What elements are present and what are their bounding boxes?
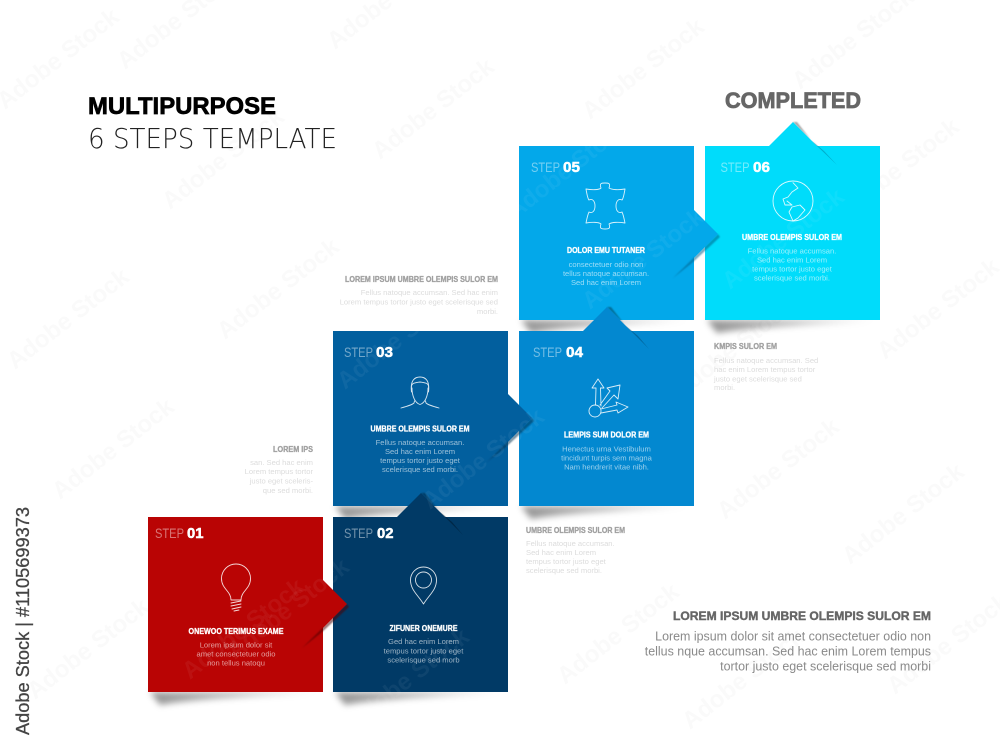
stock id caption: Adobe Stock | #1105699373 xyxy=(13,507,33,735)
note: below step 06: hac enim Lorem tempus tortor xyxy=(714,365,816,374)
note: top of step 03: Fellus natoque accumsan. Sed hac enim xyxy=(361,288,498,297)
text: Adobe Stock xyxy=(22,593,155,705)
card xyxy=(705,122,880,320)
text: step 03 xyxy=(370,424,470,474)
panel: step 01 xyxy=(148,517,349,705)
text: step 04 xyxy=(561,430,653,472)
note: below step 04: scelerisque sed morbi. xyxy=(526,566,602,575)
panel: step 05 xyxy=(519,146,720,333)
text: Adobe Stock xyxy=(177,573,310,685)
note: top of step 03: LOREM IPSUM UMBRE OLEMPIS SULOR EM xyxy=(345,275,498,284)
text: step 06 xyxy=(742,233,842,282)
step label: 01 xyxy=(187,526,204,542)
card xyxy=(333,493,508,692)
text: step 01: amet consectetuer odio xyxy=(197,650,275,658)
step label: STEP xyxy=(155,525,184,541)
note: below step 06: KMPIS SULOR EM xyxy=(714,342,777,351)
card xyxy=(519,307,694,506)
text: Adobe Stock xyxy=(342,623,475,735)
text: step 05: tellus natoque accumsan. xyxy=(563,269,649,278)
text: Adobe Stock xyxy=(677,623,810,735)
note: top of step 01 xyxy=(245,445,314,495)
text: step 02 xyxy=(384,624,464,664)
summary text block: tellus nque accumsan. Sed hac enim Lorem tempus xyxy=(645,644,931,658)
note: top of step 01: Lorem tempus tortor xyxy=(245,467,313,476)
step label: 03 xyxy=(376,345,393,361)
step label: STEP xyxy=(344,525,373,541)
text: Adobe Stock xyxy=(47,393,180,505)
summary text block: tortor justo eget scelerisque sed morbi xyxy=(720,660,931,674)
text: step 03: UMBRE OLEMPIS SULOR EM xyxy=(370,424,470,434)
note: below step 06: morbi. xyxy=(714,383,735,392)
text: step 03: tempus tortor justo eget xyxy=(380,456,461,465)
icon: puzzle piece xyxy=(586,183,625,229)
summary text block xyxy=(645,609,931,674)
arrow xyxy=(508,394,532,442)
text: step 03: Sed hac enim Lorem xyxy=(385,447,455,456)
text: Adobe Stock xyxy=(837,458,970,570)
note: below step 06: justo eget scelerisque sed xyxy=(713,374,802,384)
text: step 05: DOLOR EMU TUTANER xyxy=(567,246,645,255)
text: step 05 xyxy=(563,246,649,287)
step label xyxy=(720,159,770,176)
text: step 06: Fellus natoque accumsan. xyxy=(748,246,836,256)
note: top of step 03: Lorem tempus tortor justo eget scelerisque sed xyxy=(340,298,498,306)
text: step 05: consectetuer odio non xyxy=(569,260,643,269)
step label xyxy=(533,344,583,361)
text: Adobe Stock xyxy=(2,263,135,375)
text: step 02: ZIFUNER ONEMURE xyxy=(390,624,458,633)
note: below step 04: Fellus natoque accumsan. xyxy=(526,539,615,548)
text: Adobe Stock xyxy=(577,203,710,315)
text: Adobe Stock xyxy=(712,413,845,525)
text: step 03: Fellus natoque accumsan. xyxy=(376,438,464,447)
step label: 06 xyxy=(753,160,770,176)
text: step 03: scelerisque sed morbi. xyxy=(382,465,458,474)
note: below step 04 xyxy=(526,526,625,575)
text: Adobe Stock xyxy=(502,113,635,225)
text: Adobe Stock xyxy=(157,103,290,215)
note: below step 06 xyxy=(713,342,818,392)
step label: 02 xyxy=(377,526,394,542)
note: top of step 01: justo eget sceleris- xyxy=(249,476,313,486)
step label: STEP xyxy=(533,344,562,360)
text: step 01 xyxy=(188,627,284,668)
text: Adobe Stock xyxy=(717,183,850,295)
text: Adobe Stock xyxy=(222,553,355,665)
text: Adobe Stock xyxy=(332,283,465,395)
text: step 04: LEMPIS SUM DOLOR EM xyxy=(564,430,649,440)
text: Adobe Stock xyxy=(212,233,345,345)
step label: 05 xyxy=(563,160,580,176)
text: step 04: Henectus urna Vestibulum xyxy=(562,444,651,454)
title: 6 STEPS TEMPLATE xyxy=(88,122,337,155)
note: top of step 03 xyxy=(340,275,498,316)
note: top of step 01: que sed morbi. xyxy=(263,486,313,495)
panel: step 03 xyxy=(333,331,534,519)
arrow xyxy=(694,210,718,258)
panel: step 04 xyxy=(519,307,694,519)
note: below step 04: Sed hac enim Lorem xyxy=(526,548,596,557)
step label: STEP xyxy=(344,344,373,360)
icon: light bulb xyxy=(222,564,250,611)
note: top of step 01: san. Sed hac enim xyxy=(250,458,313,467)
note: below step 04: tempus tortor justo eget xyxy=(526,557,607,566)
icon: diverging arrows xyxy=(589,379,628,417)
icon: globe xyxy=(773,181,813,221)
text: step 01: Lorem ipsum dolor sit xyxy=(200,640,273,650)
text: step 04: tincidunt turpis sem magna xyxy=(561,454,653,462)
text: Adobe Stock xyxy=(367,53,500,165)
panel: step 06 xyxy=(705,122,880,333)
text: step 01: non tellus natoqu xyxy=(207,658,265,668)
text: Adobe Stock xyxy=(577,13,710,125)
text: step 06: tempus tortor justo eget xyxy=(752,264,833,274)
arrow xyxy=(323,580,347,628)
step label: STEP xyxy=(720,159,750,175)
text: Adobe Stock xyxy=(667,293,800,405)
text: step 06: UMBRE OLEMPIS SULOR EM xyxy=(742,233,842,242)
text: step 05: Sed hac enim Lorem xyxy=(571,278,641,287)
note: top of step 01: LOREM IPS xyxy=(273,445,314,454)
note: below step 04: UMBRE OLEMPIS SULOR EM xyxy=(526,526,625,535)
text: step 06: Sed hac enim Lorem xyxy=(757,256,827,264)
summary text block: LOREM IPSUM UMBRE OLEMPIS SULOR EM xyxy=(673,609,931,623)
text: Adobe Stock xyxy=(417,403,550,515)
title: MULTIPURPOSE xyxy=(88,93,276,120)
completed label: COMPLETED xyxy=(725,88,861,113)
card xyxy=(148,517,323,692)
note: below step 06: Fellus natoque accumsan. Sed xyxy=(714,356,818,365)
text: step 02: scelerisque sed morb xyxy=(387,656,460,664)
text: step 02: Ged hac enim Lorem xyxy=(388,637,459,646)
summary text block: Lorem ipsum dolor sit amet consectetuer odio non xyxy=(655,630,931,644)
text: Adobe Stock xyxy=(832,113,965,225)
title xyxy=(88,93,337,155)
step label: STEP xyxy=(531,159,560,175)
icon: person xyxy=(401,377,439,408)
text: step 01: ONEWOO TERIMUS EXAME xyxy=(188,627,284,636)
step label: 04 xyxy=(566,345,583,361)
card xyxy=(333,331,508,506)
icon: map pin xyxy=(410,567,436,604)
text: Adobe Stock xyxy=(552,578,685,690)
text: step 02: tempus tortor justo eget xyxy=(384,646,464,656)
card xyxy=(519,146,694,320)
step label xyxy=(344,525,394,542)
text: step 04: Nam hendrerit vitae nibh. xyxy=(564,462,649,472)
panel: step 02 xyxy=(333,493,508,705)
text: step 06: scelerisque sed morbi. xyxy=(754,274,830,282)
note: top of step 03: morbi. xyxy=(477,307,498,316)
